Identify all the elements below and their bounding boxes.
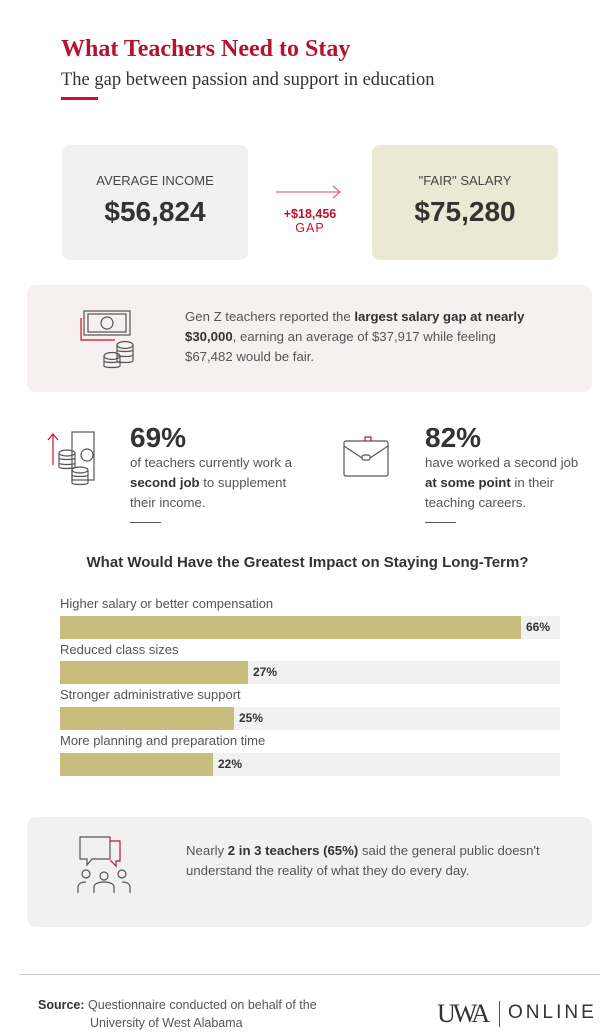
bar chart: Stronger administrative support: [60, 687, 241, 702]
stat: 69%: [48, 422, 292, 523]
bar chart: 66%: [526, 620, 550, 634]
stat: 69%: of teachers currently work a second job to supplement their income.: [130, 455, 292, 510]
title: What Teachers Need to Stay: [61, 36, 350, 62]
bar chart: More planning and preparation time: [60, 733, 265, 748]
icon: money and coins: [80, 310, 134, 368]
bar chart: 25%: [239, 711, 263, 725]
arrow with gap: [276, 186, 341, 235]
bar chart: 22%: [218, 757, 242, 771]
stat: 82%: [343, 422, 578, 523]
icon: coins with arrow: [48, 431, 95, 486]
text: Gen Z: Gen Z teachers reported the largest salary gap at nearly $30,000, earning an average of $37,917 while feeling $67,482 would be fair.: [185, 309, 524, 364]
panel: average income: [62, 145, 248, 260]
icon: people talking: [77, 836, 131, 893]
panel: fair salary: "FAIR" SALARY: [419, 173, 511, 188]
stat: 82%: have worked a second job at some point in their teaching careers.: [425, 455, 578, 510]
panel: fair salary: $75,280: [414, 196, 516, 227]
panel: Gen Z callout: [27, 285, 592, 392]
bar chart: Reduced class sizes: [60, 642, 178, 657]
arrow with gap: GAP: [295, 221, 325, 235]
source: Source: Questionnaire conducted on behalf of the: [38, 998, 317, 1012]
panel: average income: AVERAGE INCOME: [96, 173, 214, 188]
panel: fair salary: [372, 145, 558, 260]
logo: ONLINE: [508, 1002, 597, 1023]
stat: 69%: 69%: [130, 422, 186, 453]
panel: average income: $56,824: [104, 196, 206, 227]
source: University of West Alabama: [90, 1016, 243, 1030]
chart heading: What Would Have the Greatest Impact on Staying Long-Term?: [86, 554, 528, 571]
accent line: [61, 97, 98, 100]
logo: UWA: [437, 999, 487, 1028]
logo: [437, 999, 597, 1028]
subtitle: The gap between passion and support in education: [61, 70, 434, 90]
arrow with gap: +$18,456: [284, 207, 336, 221]
bar chart: 27%: [253, 665, 277, 679]
stat: 82%: 82%: [425, 422, 481, 453]
bar chart: [60, 596, 560, 776]
panel: public perception: [27, 817, 592, 927]
text: public: Nearly 2 in 3 teachers (65%) said the general public doesn't understand the reality of what they do every day.: [186, 843, 540, 878]
icon: briefcase: [343, 436, 389, 477]
source: [38, 998, 317, 1030]
bar chart: Higher salary or better compensation: [60, 596, 273, 611]
